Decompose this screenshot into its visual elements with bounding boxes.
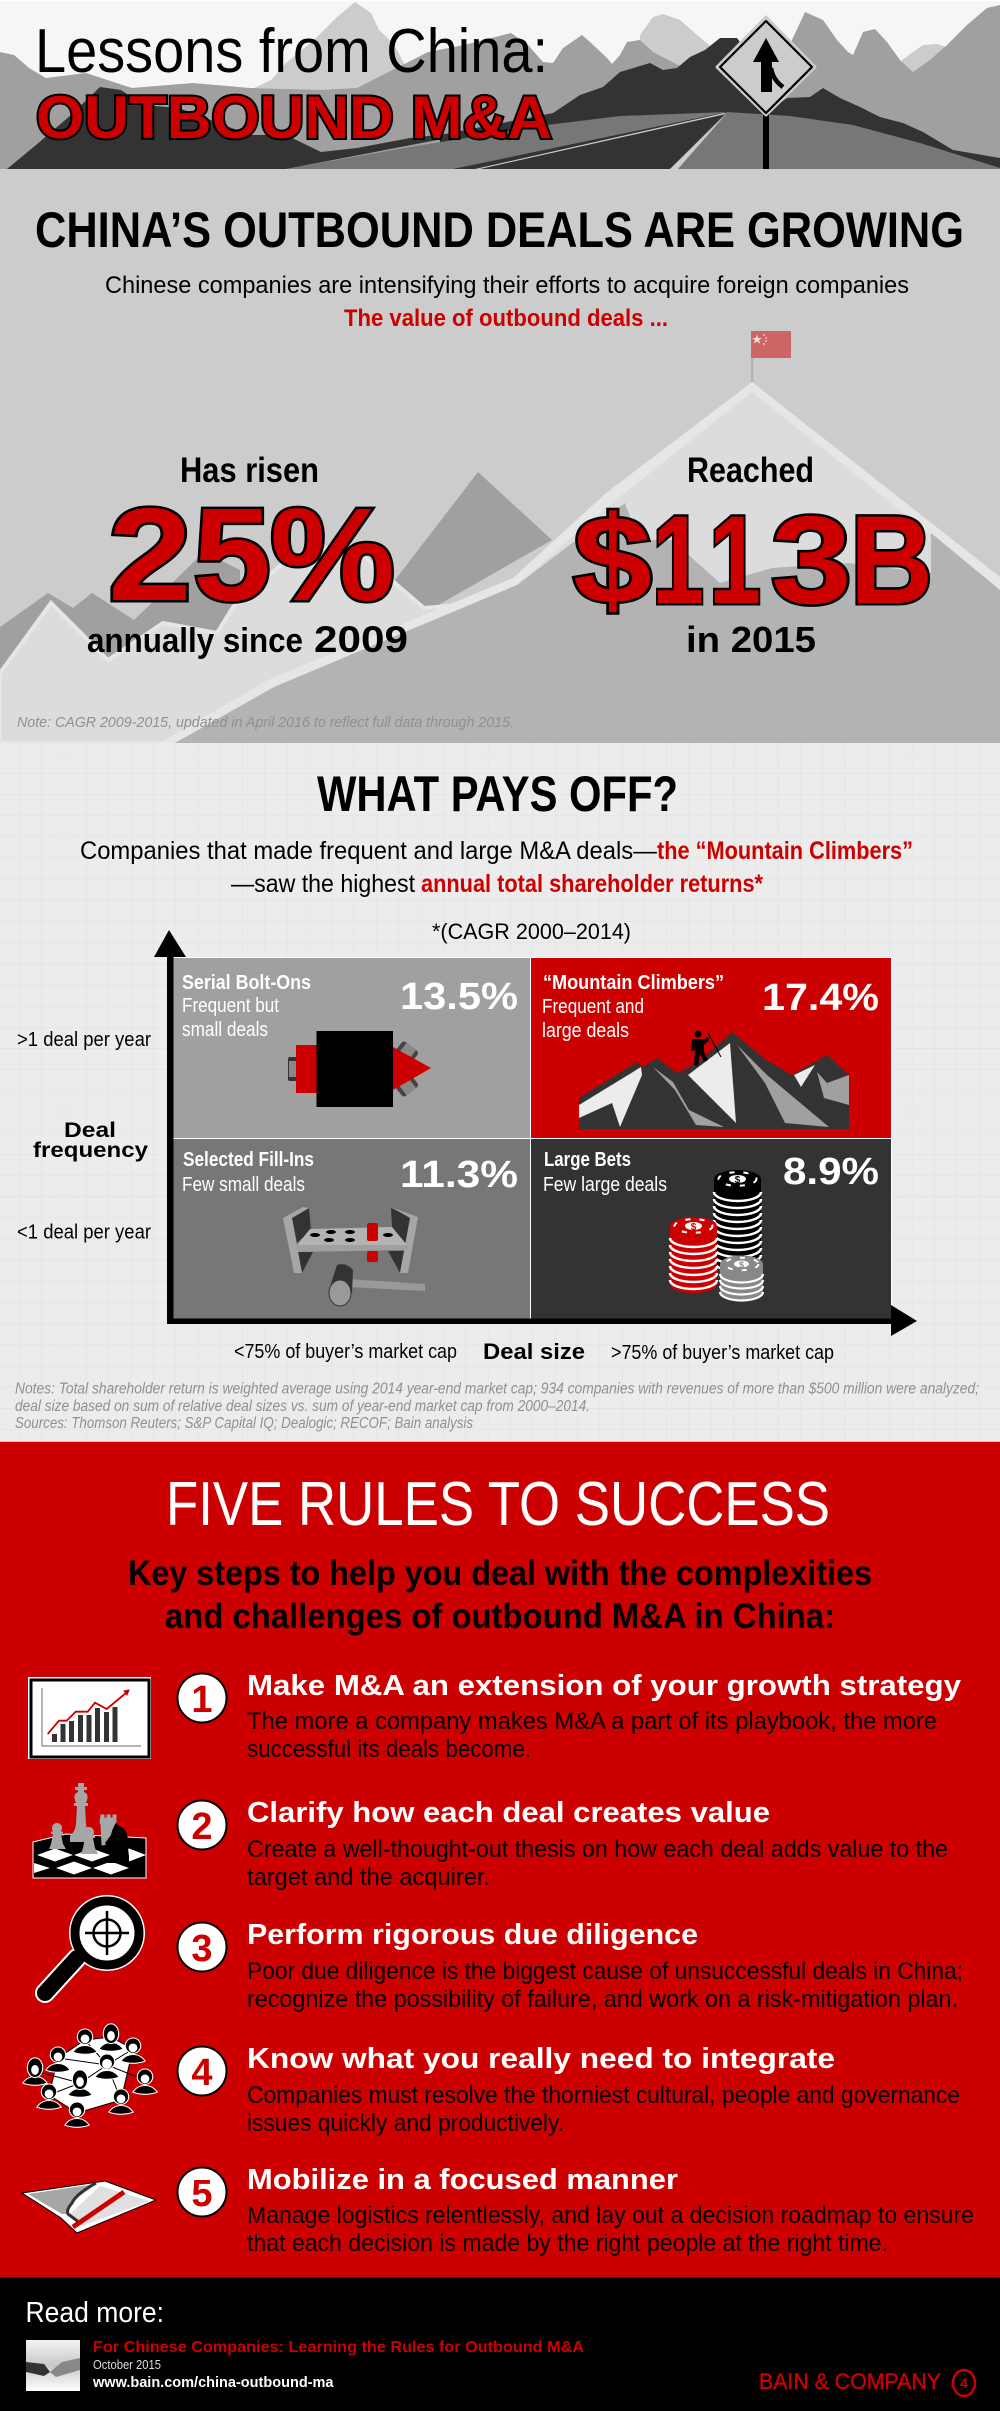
quadrant: selected fill-ins: Selected Fill-Ins bbox=[183, 1149, 314, 1171]
quadrant: serial bolt-ons: small deals bbox=[182, 1019, 268, 1041]
rule 5 body: that each decision is made by the right people at the right time. bbox=[247, 2230, 888, 2257]
intro heading: and challenges of outbound M&A in China: bbox=[165, 1597, 835, 1636]
number badge 3: 3 bbox=[191, 1928, 213, 1970]
rule 2 body bbox=[247, 1836, 948, 1891]
quadrant: serial bolt-ons bbox=[173, 958, 530, 1138]
rule 5 body bbox=[247, 2202, 974, 2257]
stat: 25%: 2 bbox=[108, 481, 192, 628]
rule 2 bbox=[33, 1783, 948, 1891]
intro heading: Key steps to help you deal with the complexities bbox=[128, 1554, 872, 1593]
stat: 25% bbox=[87, 451, 408, 660]
icon: bolt bbox=[288, 1031, 431, 1107]
quadrant: large bets bbox=[531, 1139, 891, 1319]
rule 1 body: successful its deals become. bbox=[247, 1736, 531, 1763]
quadrant: selected fill-ins: Few small deals bbox=[182, 1174, 305, 1196]
number badge 3 bbox=[178, 1922, 226, 1972]
number badge 4: 4 bbox=[191, 2052, 213, 2094]
quadrant: mountain climbers bbox=[531, 958, 891, 1138]
number badge 4 bbox=[178, 2046, 226, 2096]
quadrant: selected fill-ins bbox=[173, 1139, 530, 1319]
icon: China flag bbox=[751, 331, 791, 382]
number badge 1: 1 bbox=[191, 1679, 213, 1721]
stat: $113B: Reached bbox=[687, 451, 814, 490]
icon: magnifying glass bbox=[45, 1895, 145, 1993]
icon: chess board bbox=[33, 1783, 146, 1878]
report thumbnail bbox=[26, 2340, 80, 2391]
y axis arrow bbox=[154, 930, 186, 1324]
rule 2 title: Clarify how each deal creates value bbox=[247, 1797, 770, 1829]
title: Lessons from China: Lessons from China: bbox=[35, 17, 548, 86]
icon: mountain with climber bbox=[579, 1030, 849, 1129]
rule 1 body: The more a company makes M&A a part of its playbook, the more bbox=[247, 1708, 937, 1735]
rule 3 body: Poor due diligence is the biggest cause of unsuccessful deals in China; bbox=[247, 1958, 963, 1985]
y axis labels: >1 deal per year bbox=[17, 1029, 151, 1051]
rule 1 title: Make M&A an extension of your growth strategy bbox=[247, 1670, 961, 1702]
matrix chart bbox=[154, 930, 917, 1336]
rule 3 body bbox=[247, 1958, 963, 2013]
rule 3 body: recognize the possibility of failure, and work on a risk-mitigation plan. bbox=[247, 1986, 958, 2013]
stat: $113B: 1 bbox=[652, 491, 704, 630]
icon: growth chart bbox=[28, 1677, 151, 1759]
quadrant: large bets: Large Bets bbox=[544, 1149, 631, 1171]
quadrant: large bets: 8.9% bbox=[783, 1151, 879, 1193]
header mountains bbox=[0, 2, 1000, 169]
rule 1 body bbox=[247, 1708, 937, 1763]
rule 4 body: issues quickly and productively. bbox=[247, 2110, 564, 2137]
read more label: Read more: bbox=[26, 2297, 164, 2329]
intro text: Chinese companies are intensifying their efforts to acquire foreign companies bbox=[105, 272, 909, 299]
intro text: Companies that made frequent and large M&A deals— bbox=[80, 837, 657, 865]
number badge 2: 2 bbox=[191, 1806, 213, 1848]
footer bbox=[0, 2277, 1000, 2411]
notes and sources: Sources: Thomson Reuters; S&P Capital IQ; Dealogic; RECOF; Bain analysis bbox=[15, 1415, 473, 1432]
rule 3 title: Perform rigorous due diligence bbox=[247, 1919, 698, 1951]
x axis labels: Deal size bbox=[483, 1339, 585, 1364]
report url: www.bain.com/china-outbound-ma bbox=[92, 2375, 334, 2391]
quadrant: mountain climbers: large deals bbox=[542, 1020, 629, 1042]
black chip stack: $ bbox=[735, 1175, 741, 1186]
stat: 25%: annually since bbox=[87, 622, 303, 660]
panel: what pays off bbox=[0, 743, 1000, 1442]
quadrant: serial bolt-ons: 13.5% bbox=[400, 976, 518, 1018]
panel: five rules to success bbox=[0, 1441, 1000, 2277]
mountains background bbox=[0, 382, 1000, 743]
road bbox=[286, 112, 1000, 169]
intro text: the “Mountain Climbers” bbox=[657, 837, 913, 865]
Bain & Company logo: 4 bbox=[960, 2375, 968, 2391]
grey chip stack: $ bbox=[739, 1260, 744, 1270]
icon: map bbox=[22, 2181, 156, 2233]
stat: $113B: in 2015 bbox=[686, 619, 816, 660]
icon: peg board and mallet bbox=[283, 1207, 425, 1306]
y axis labels: <1 deal per year bbox=[17, 1222, 151, 1244]
x axis arrow bbox=[167, 1305, 917, 1336]
stat: $113B bbox=[573, 451, 933, 660]
title: Outbound M&A: OUTBOUND M&A bbox=[36, 84, 552, 151]
y axis labels bbox=[17, 1029, 151, 1244]
intro text bbox=[80, 837, 913, 898]
x axis labels: <75% of buyer’s market cap bbox=[234, 1341, 457, 1363]
stat: 25%: % bbox=[270, 481, 395, 628]
stat: $113B: 3 bbox=[771, 491, 852, 630]
number badge 1 bbox=[178, 1674, 226, 1722]
stat: 25%: 2009 bbox=[314, 619, 408, 660]
x axis labels: >75% of buyer’s market cap bbox=[611, 1342, 834, 1364]
quadrant: serial bolt-ons: Frequent but bbox=[182, 995, 279, 1017]
note: Note: CAGR 2009-2015, updated in April 2016 to reflect full data through 2015. bbox=[17, 714, 514, 731]
number badge 5 bbox=[178, 2168, 226, 2216]
rule 3 bbox=[45, 1895, 963, 2013]
quadrant: mountain climbers: Frequent and bbox=[542, 996, 644, 1018]
icon: merge road sign bbox=[717, 17, 815, 169]
header banner bbox=[0, 0, 1000, 169]
red chip stack: $ bbox=[691, 1222, 697, 1233]
heading: WHAT PAYS OFF? bbox=[317, 766, 678, 822]
quadrant: mountain climbers: 17.4% bbox=[762, 977, 879, 1019]
x axis labels bbox=[234, 1339, 834, 1364]
rule 5 bbox=[22, 2164, 974, 2257]
stat: 25%: Has risen bbox=[180, 451, 319, 490]
notes and sources: deal size based on sum of relative deal sizes vs. sum of year-end market cap from 2000–2014. bbox=[15, 1398, 590, 1415]
report date: October 2015 bbox=[93, 2358, 161, 2372]
number badge 2 bbox=[178, 1800, 226, 1850]
quadrant: selected fill-ins: 11.3% bbox=[400, 1154, 518, 1196]
panel: outbound deals are growing bbox=[0, 169, 1000, 743]
y axis labels: frequency bbox=[33, 1139, 148, 1162]
intro text: annual total shareholder returns* bbox=[421, 870, 763, 898]
rule 2 body: target and the acquirer. bbox=[247, 1864, 490, 1891]
red subheading: The value of outbound deals ... bbox=[344, 305, 668, 332]
Bain & Company logo: BAIN & COMPANY bbox=[759, 2369, 941, 2394]
quadrant: large bets: Few large deals bbox=[543, 1174, 667, 1196]
rule 5 body: Manage logistics relentlessly, and lay out a decision roadmap to ensure bbox=[247, 2202, 974, 2229]
stat: 25%: 5 bbox=[193, 481, 271, 628]
intro text: —saw the highest bbox=[231, 870, 415, 898]
stat: $113B: $ bbox=[573, 491, 652, 630]
report title: For Chinese Companies: Learning the Rules for Outbound M&A bbox=[93, 2339, 584, 2356]
CAGR note: *(CAGR 2000–2014) bbox=[432, 919, 631, 944]
intro heading bbox=[128, 1554, 872, 1636]
stat: $113B: 1 bbox=[709, 491, 761, 630]
rule 4 body: Companies must resolve the thorniest cultural, people and governance bbox=[247, 2082, 960, 2109]
number badge 5: 5 bbox=[191, 2173, 213, 2215]
quadrant: serial bolt-ons: Serial Bolt-Ons bbox=[182, 972, 311, 994]
y axis labels: Deal bbox=[64, 1119, 116, 1142]
stat: $113B: B bbox=[850, 491, 933, 630]
icon: poker chips bbox=[670, 1170, 763, 1302]
rule 4 body bbox=[247, 2082, 960, 2137]
rule 5 title: Mobilize in a focused manner bbox=[247, 2164, 678, 2196]
rule 2 body: Create a well-thought-out thesis on how each deal adds value to the bbox=[247, 1836, 948, 1863]
quadrant: mountain climbers: “Mountain Climbers” bbox=[543, 972, 724, 994]
icon: people network bbox=[23, 2024, 157, 2127]
rule 4 bbox=[23, 2024, 960, 2137]
rule 1 bbox=[28, 1670, 961, 1763]
heading: FIVE RULES TO SUCCESS bbox=[166, 1470, 830, 1539]
climber bbox=[691, 1030, 721, 1066]
notes and sources bbox=[15, 1380, 979, 1432]
rule 4 title: Know what you really need to integrate bbox=[247, 2043, 835, 2075]
